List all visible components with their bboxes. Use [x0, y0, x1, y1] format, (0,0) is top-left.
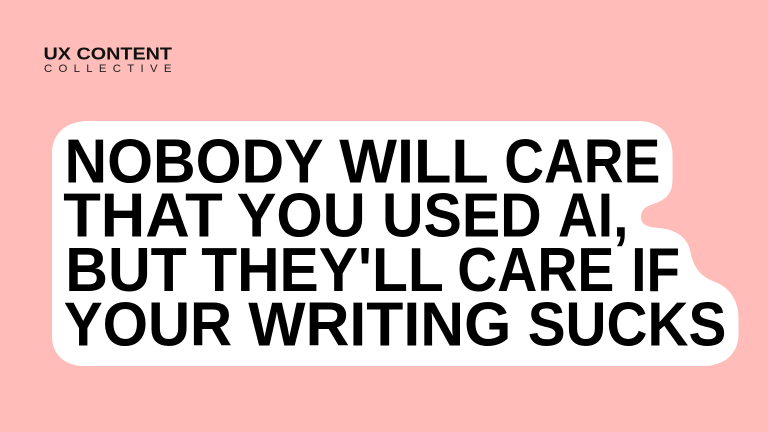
- headline line 3: BUT: [65, 236, 187, 305]
- headline line 3: CARE: [457, 236, 614, 305]
- headline line 1: NOBODY: [64, 127, 324, 196]
- headline line 4: SUCKS: [528, 290, 726, 360]
- headline line 1: WILL: [339, 127, 489, 196]
- headline line 3: THEY'LL: [201, 236, 444, 305]
- headline line 4: YOUR: [64, 290, 232, 360]
- headline line 3: [65, 236, 680, 305]
- headline line 4: [64, 290, 726, 360]
- headline line 1: [64, 127, 660, 196]
- headline: [63, 127, 726, 360]
- headline line 3: IF: [631, 236, 680, 305]
- headline line 2: AI,: [558, 182, 628, 251]
- logo: UX Content Collective: [44, 43, 172, 75]
- headline line 2: [63, 182, 628, 251]
- headline line 4: WRITING: [248, 290, 511, 360]
- logo wordmark: UX CONTENT: [44, 43, 172, 63]
- headline line 2: THAT: [63, 182, 223, 251]
- headline line 2: YOU: [237, 182, 366, 251]
- headline line 1: CARE: [504, 127, 660, 196]
- headline line 2: USED: [382, 182, 542, 251]
- logo subline: COLLECTIVE: [44, 63, 172, 75]
- white blob panel behind headline: [52, 121, 738, 366]
